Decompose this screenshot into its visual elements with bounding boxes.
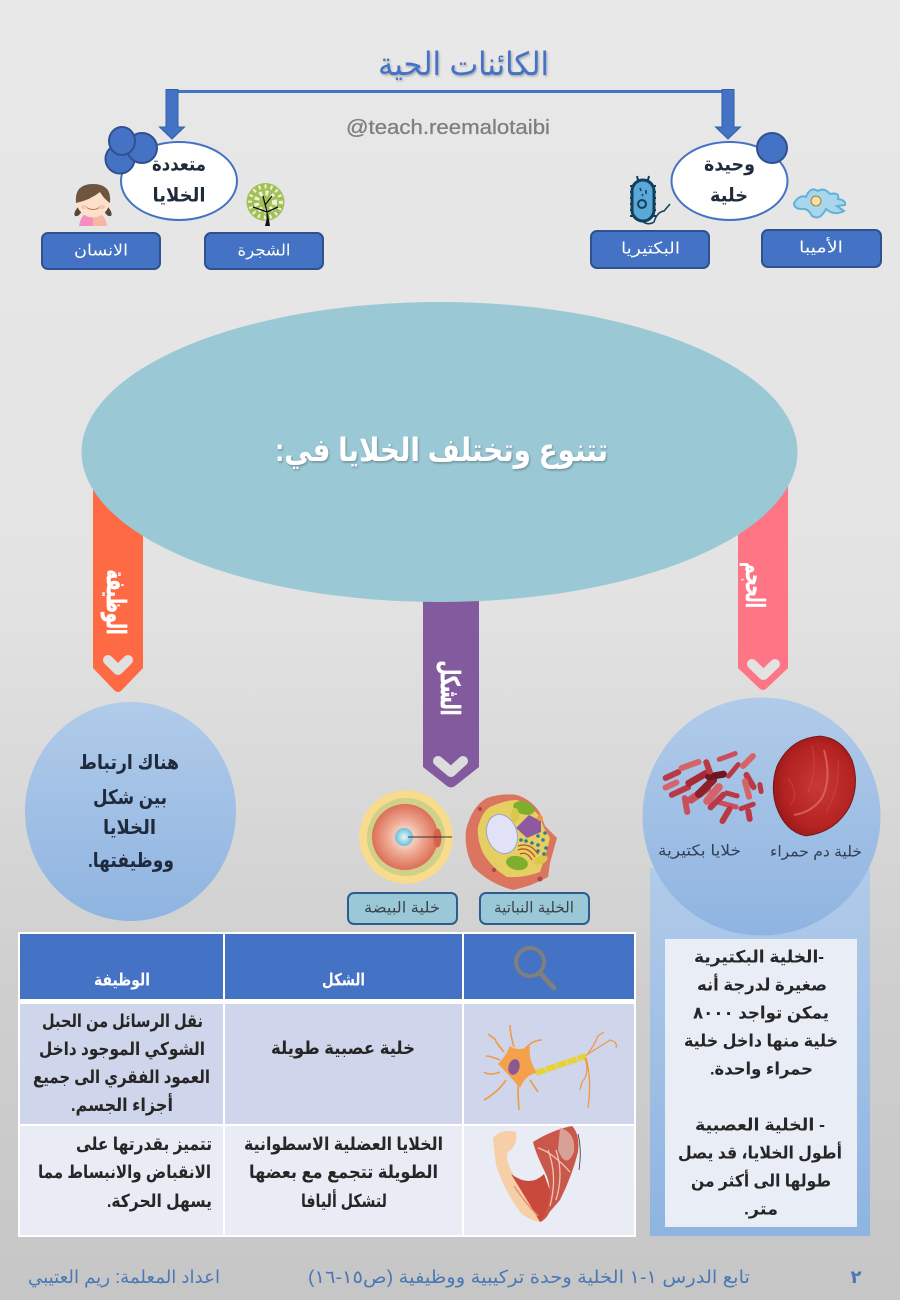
box: human [42,233,160,269]
box: amoeba [762,230,881,267]
size text: أطول الخلايا، قد يصل [678,1142,842,1164]
icon: neuron [484,1025,616,1110]
icon: arm muscle [493,1126,580,1222]
icon: egg cell [360,791,452,883]
label: multicellular [152,154,206,206]
lesson title: تابع الدرس ١-١ الخلية وحدة تركيبية ووظيفية (ص١٥-١٦) [308,1267,750,1288]
central heading: تتنوع وتختلف الخلايا في: [275,432,608,469]
size text [678,948,842,1220]
table header: الوظيفة [94,970,150,990]
panel: plant cell [466,794,589,924]
icon: girl [74,184,112,226]
panel: egg cell [348,791,457,924]
central ellipse [82,302,798,602]
icon: cell cluster [106,127,157,174]
bubble: multicellular [121,142,237,220]
table row: nerve cell: العمود الفقري الى جميع [33,1067,210,1088]
table row: muscle cell: لتشكل أليافا [301,1189,387,1211]
panel: size [642,698,880,1236]
label: unicellular: خلية [710,186,748,206]
icon: chevron [752,664,775,675]
table row: nerve cell [20,1004,634,1124]
background card [650,868,870,1236]
author: اعداد المعلمة: ريم العتيبي [28,1267,220,1288]
size text card [665,939,857,1227]
box: bacteria [591,231,709,268]
size text: طولها الى أكثر من [691,1170,831,1192]
box: human: الانسان [74,242,128,260]
table row: nerve cell: الشوكي الموجود داخل [39,1039,205,1060]
table row: nerve cell: أجزاء الجسم. [71,1093,173,1116]
size text: - الخلية العصبية [695,1116,825,1134]
size text: صغيرة لدرجة أنه [697,974,827,996]
icon: plant cell [466,794,557,890]
icon: red blood cell [773,736,856,836]
icon: amoeba [794,189,845,217]
table header: الشكل [322,970,365,990]
table row: nerve cell: نقل الرسائل من الحبل [42,1011,203,1032]
label: unicellular [704,154,755,206]
box: tree: الشجرة [238,242,290,260]
panel: unicellular [591,133,881,268]
icon: chevron [438,761,463,772]
caption: bacterial cells: خلايا بكتيرية [658,842,741,860]
table row: muscle cell [20,1126,634,1235]
size text: خلية منها داخل خلية [684,1032,838,1052]
size text: متر. [744,1200,778,1220]
label: unicellular: وحيدة [704,154,755,176]
box: amoeba: الأميبا [799,236,843,256]
footer [28,1267,862,1288]
icon: magnifier [516,948,554,988]
table row: nerve cell: خلية عصبية طويلة [271,1038,415,1059]
table row: muscle cell: الخلايا العضلية الاسطوانية [244,1134,443,1155]
table row: muscle cell: الطويلة تتجمع مع بعضها [249,1162,438,1183]
icon: bacterium [630,176,670,224]
icon: single cell [757,133,787,163]
size circle [642,698,880,936]
box: bacteria: البكتيريا [621,240,680,258]
caption: red blood cell: خلية دم حمراء [770,844,862,860]
connector with two arrows [160,90,740,139]
box: egg cell: خلية البيضة [364,900,440,916]
icon: bacteria group [662,750,764,825]
ribbon label: function: الوظيفة [100,570,131,634]
label: multicellular: الخلايا [152,186,206,206]
bubble: unicellular [672,142,788,220]
table [18,932,636,1237]
panel: multicellular [42,127,323,269]
table header [20,934,634,999]
ribbon: function [93,470,143,692]
ribbon label: shape: الشكل [435,660,465,716]
function text: بين شكل [93,787,167,809]
function text: ووظيفتها. [88,850,174,872]
ribbon label: size: الحجم [740,562,770,608]
size text: -الخلية البكتيرية [694,948,824,968]
function text [79,752,179,872]
icon: tree [246,183,284,226]
function text: الخلايا [103,817,156,839]
function text: هناك ارتباط [79,752,179,774]
ribbon: size [738,470,788,690]
box: plant cell: الخلية النباتية [494,900,574,916]
icon: chevron [108,660,128,670]
panel: function circle [25,702,236,921]
table row: muscle cell: يسهل الحركة. [107,1191,212,1212]
table row: muscle cell: تتميز بقدرتها على [76,1134,212,1155]
title: الكائنات الحية [378,46,549,82]
handle: @teach.reemalotaibi [346,117,550,139]
page number: ٢ [850,1267,862,1287]
table row: muscle cell: الانقباض والانبساط مما [38,1162,211,1183]
label: multicellular: متعددة [152,154,206,176]
size text: حمراء واحدة. [710,1060,813,1080]
size text: يمكن تواجد ٨٠٠٠ [693,1004,829,1024]
ribbon: shape [423,590,479,788]
box: tree [205,233,323,269]
